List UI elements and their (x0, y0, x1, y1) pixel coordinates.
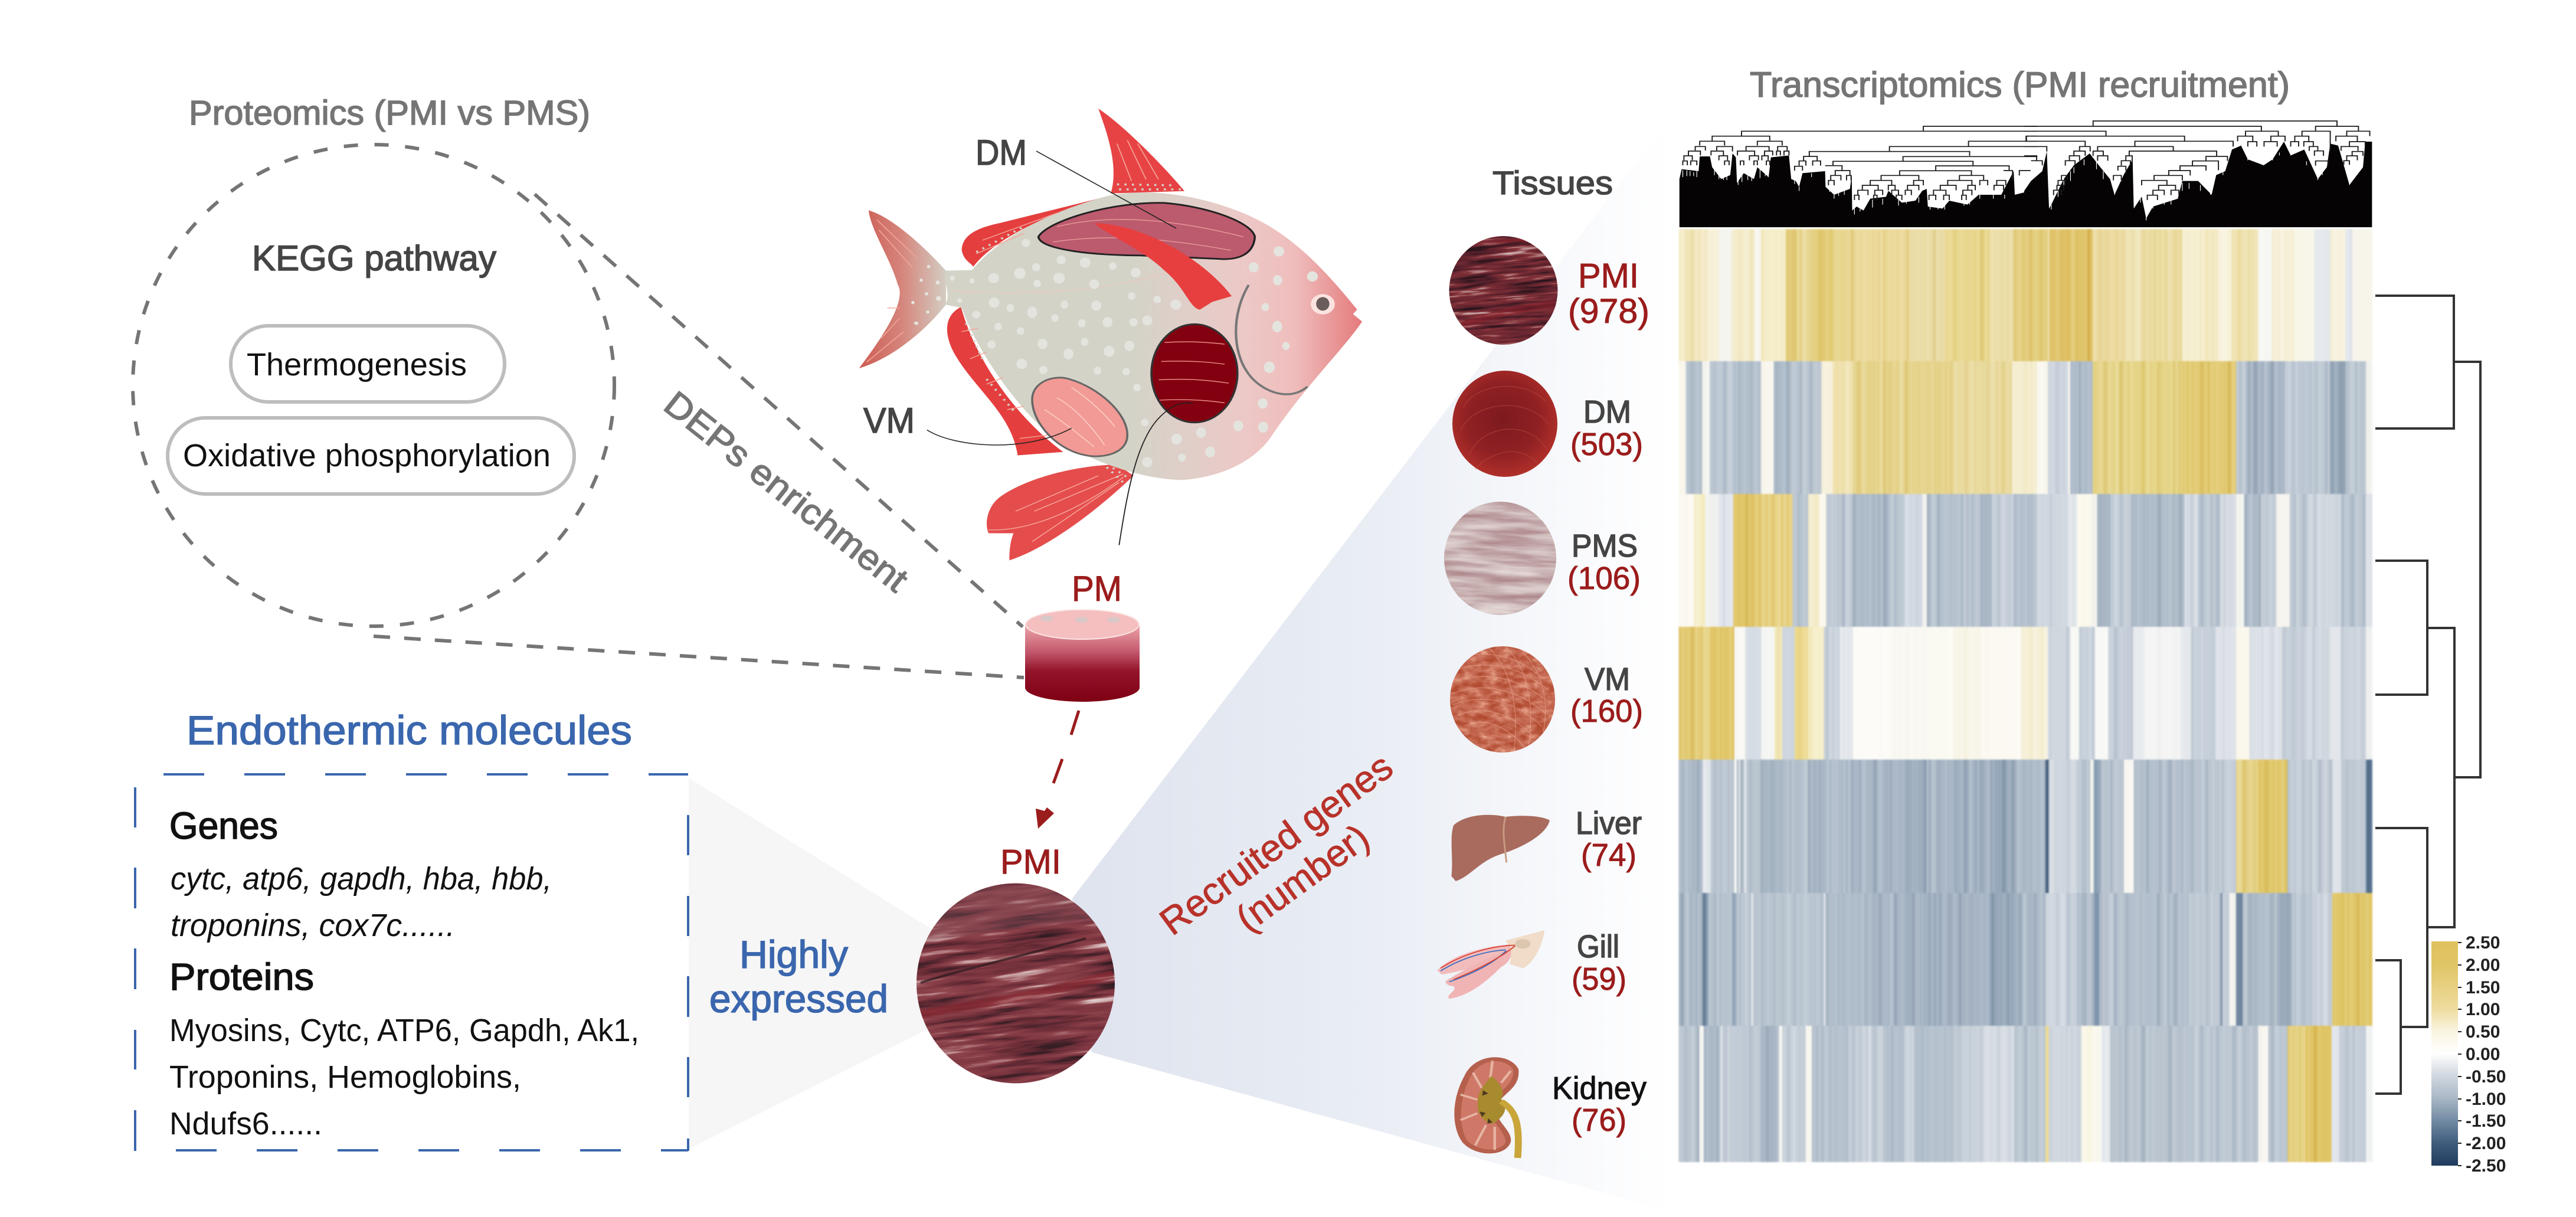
anal fin (947, 307, 1063, 455)
icon: gill (1437, 930, 1544, 999)
label: recruited genes: Recruited genes (1152, 745, 1400, 943)
dorsal fin (1098, 109, 1184, 194)
heatmap row: PMI (1679, 229, 2372, 361)
label: kidney count: (76) (1572, 1103, 1626, 1138)
label: DM count: (503) (1570, 427, 1643, 462)
proteins list: Troponins, Hemoglobins, (169, 1059, 521, 1095)
label: DM count: DM (1583, 394, 1631, 430)
pill: oxidative phosphorylation (168, 418, 574, 494)
label: highly expressed: Highly (739, 933, 848, 976)
label: gill count (1572, 929, 1626, 997)
pill: oxidative phosphorylation: Oxidative phosphorylation (183, 438, 551, 473)
tissue: Liver (1451, 806, 1642, 881)
label: PMI count (1568, 257, 1649, 331)
row dendrogram (2375, 296, 2480, 1094)
proteins list: Myosins, Cytc, ATP6, Gapdh, Ak1, (169, 1013, 639, 1048)
colour bar labels: 2.00 (2466, 956, 2500, 975)
label: VM count: VM (1585, 662, 1630, 697)
icon: PMS muscle (1444, 502, 1556, 615)
icon: liver (1451, 815, 1550, 881)
tissue: DM (1452, 371, 1643, 477)
heading: transcriptomics: Transcriptomics (PMI recruitment) (1750, 65, 2290, 104)
colour bar labels: 0.00 (2466, 1045, 2500, 1064)
proteins heading: Proteins (169, 956, 314, 998)
colour bar labels: 2.50 (2466, 933, 2500, 953)
heatmap row: Liver (1679, 760, 2372, 893)
label: kidney count (1552, 1071, 1647, 1138)
heatmap fine stripe texture (1679, 229, 2372, 1162)
heatmap row: DM (1679, 361, 2372, 494)
genes heading: Genes (169, 804, 278, 847)
body (945, 192, 1362, 480)
eye (1311, 294, 1335, 315)
label: PMI count: PMI (1578, 257, 1639, 295)
genes list: cytc, atp6, gapdh, hba, hbb, (171, 861, 552, 897)
colour bar labels: 1.50 (2466, 978, 2500, 997)
colour bar labels: 0.50 (2466, 1022, 2500, 1042)
pill: thermogenesis (231, 326, 505, 402)
panel: endothermic molecules box (135, 774, 688, 1151)
panel: KEGG pathway circle (133, 145, 614, 626)
arrow: PM to PMI (1036, 711, 1079, 829)
heatmap (1679, 229, 2372, 1162)
label: kidney count: Kidney (1552, 1071, 1647, 1106)
label: PMS count: (106) (1567, 561, 1641, 596)
label: PM: PM (1072, 569, 1122, 608)
proteins list: Ndufs6...... (169, 1106, 322, 1141)
colour bar (2431, 941, 2458, 1166)
heading: proteomics: Proteomics (PMI vs PMS) (189, 94, 590, 132)
colour bar labels: -2.00 (2466, 1134, 2506, 1153)
pectoral fin (1094, 223, 1232, 310)
dashed connectors (374, 194, 1024, 678)
label: DM: DM (976, 133, 1027, 172)
label: VM: VM (863, 401, 915, 440)
leader lines (927, 151, 1194, 545)
heatmap row: Gill (1679, 893, 2372, 1026)
icon: PMI muscle (1449, 236, 1558, 345)
label: VM count (1570, 662, 1643, 729)
highly expressed wedge (689, 778, 956, 1149)
pelvic fin (987, 464, 1134, 560)
rear dorsal fin (962, 195, 1111, 267)
fin rays (866, 140, 1173, 542)
colour bar labels: -1.50 (2466, 1111, 2506, 1131)
icon: PM muscle cylinder (1025, 610, 1140, 702)
label: gill count: Gill (1577, 929, 1619, 964)
genes list (171, 861, 552, 943)
dashed circle (133, 145, 614, 626)
tissue: VM (1446, 643, 1643, 755)
VM muscle patch (1032, 378, 1127, 456)
DM muscle patch (1038, 203, 1255, 259)
label: liver count: (74) (1581, 837, 1636, 873)
icon: kidney (1454, 1057, 1518, 1158)
tissue: PMI (1449, 236, 1648, 345)
column dendrogram (1680, 121, 2372, 227)
label: PMS count (1567, 528, 1641, 596)
pill: thermogenesis: Thermogenesis (247, 347, 467, 382)
gene recruitment wedge (1072, 106, 1679, 1213)
heatmap row: PMS (1679, 494, 2372, 627)
fish illustration (859, 109, 1362, 560)
icon: DM muscle (1452, 371, 1557, 477)
colour bar labels (2466, 933, 2506, 1176)
tail (859, 210, 946, 368)
icon: VM muscle (1450, 646, 1555, 753)
label: VM count: (160) (1570, 693, 1643, 729)
PM muscle patch (1151, 324, 1238, 423)
colour bar labels: -2.50 (2466, 1156, 2506, 1176)
colour bar labels: -0.50 (2466, 1067, 2506, 1087)
proteins list (169, 1013, 639, 1141)
KEGG heading: KEGG pathway (252, 238, 496, 278)
label: highly expressed (709, 933, 888, 1020)
tissue: Kidney (1454, 1057, 1647, 1158)
label: PMS count: PMS (1572, 528, 1638, 564)
heading: tissues: Tissues (1492, 164, 1613, 201)
colour legend (2431, 933, 2506, 1176)
tissue: Gill (1437, 929, 1626, 999)
gill arc (1236, 285, 1307, 394)
label: DEPs enrichment: DEPs enrichment (657, 384, 916, 600)
genes list: troponins, cox7c...... (171, 908, 455, 943)
tissue: PMS (1444, 502, 1639, 615)
heading: endothermic molecules: Endothermic molecules (186, 708, 632, 753)
icon: PMI muscle large (917, 883, 1115, 1084)
label: PMI count: (978) (1568, 292, 1649, 331)
fin base dots (966, 184, 1181, 482)
colour bar labels: -1.00 (2466, 1090, 2506, 1109)
label: highly expressed: expressed (709, 977, 888, 1020)
spots on body (911, 239, 1318, 467)
label: liver count (1576, 806, 1642, 873)
label: DM count (1570, 394, 1643, 462)
label: PMI: PMI (1000, 843, 1061, 881)
colour bar labels: 1.00 (2466, 1000, 2500, 1019)
label: liver count: Liver (1576, 806, 1642, 841)
label: recruited genes: (number) (1228, 816, 1377, 940)
heatmap row: Kidney (1679, 1026, 2372, 1162)
heatmap row: VM (1679, 627, 2372, 760)
label: gill count: (59) (1572, 961, 1626, 997)
